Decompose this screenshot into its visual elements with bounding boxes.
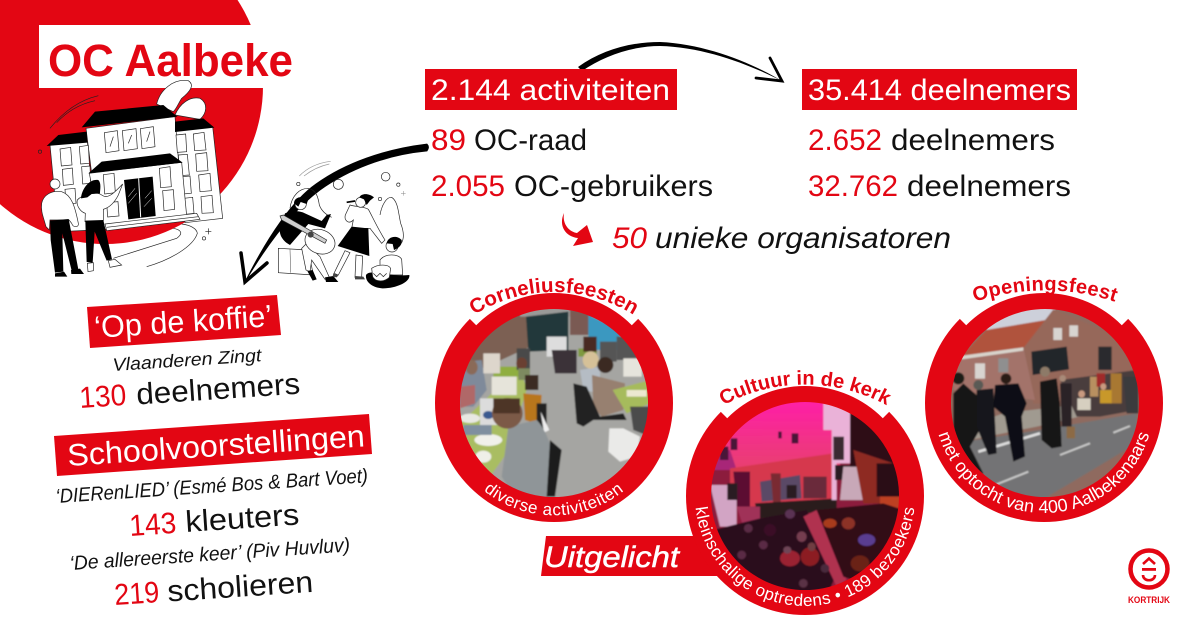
logo: Kortrijk [1128, 550, 1170, 605]
red background circle [0, 0, 263, 244]
label: kleinschalige optredens: kleinschalige optredens • 189 bezoekers [696, 506, 914, 606]
panel: op de koffie: Vlaanderen Zingt [112, 345, 263, 375]
photo: parade [951, 309, 1139, 497]
panel: schoolvoorstellingen: Schoolvoorstellingen [66, 418, 366, 473]
callout: uitgelicht: Uitgelicht [544, 541, 681, 574]
panel: schoolvoorstellingen: scholieren [166, 566, 314, 608]
stat block: activiteiten: OC-gebruikers [514, 170, 713, 203]
panel: schoolvoorstellingen: ‘De allereerste keer’ (Piv Huvluv) [69, 534, 351, 575]
stat block: deelnemers: 35.414 deelnemers [808, 74, 1071, 107]
illustration: musicians [278, 161, 409, 288]
panel: schoolvoorstellingen: 143 [128, 507, 177, 543]
panel: Openingsfeest photo circle [925, 276, 1163, 522]
label: diverse activiteiten: diverse activiteiten [485, 484, 623, 516]
panel: schoolvoorstellingen: ‘DIERenLIED’ (Esmé Bos & Bart Voet) [55, 465, 369, 508]
panel: Cultuur in de kerk photo circle [686, 370, 924, 615]
stat block: activiteiten: 89 [431, 124, 466, 157]
arrow: top curved [578, 42, 782, 81]
panel: schoolvoorstellingen: kleuters [184, 499, 300, 539]
label: met optocht: met optocht van 400 Aalbekenaars [938, 432, 1149, 513]
stat block: activiteiten: 2.144 activiteiten [431, 74, 670, 107]
label: Openingsfeest: Openingsfeest [973, 276, 1118, 302]
stat block: deelnemers: deelnemers [891, 124, 1055, 157]
arrow: left curved [241, 144, 428, 282]
stat block: deelnemers: 2.652 [808, 124, 882, 157]
photo: stage in church [711, 402, 899, 590]
panel: schoolvoorstellingen: 219 [113, 576, 160, 612]
label: Cultuur in de kerk: Cultuur in de kerk [720, 370, 892, 406]
callout: uitgelicht [541, 536, 730, 576]
illustration: building with two people [38, 80, 223, 277]
logo: Kortrijk: KORTRIJK [1128, 595, 1170, 605]
panel: op de koffie: deelnemers [135, 368, 301, 411]
stat block: deelnemers: deelnemers [907, 170, 1071, 203]
stat block: activiteiten: 2.055 [431, 170, 505, 203]
panel: schoolvoorstellingen [54, 414, 372, 612]
stat block: activiteiten [425, 69, 713, 203]
stat block: activiteiten: OC-raad [474, 124, 587, 157]
stat block: deelnemers: 32.762 [808, 170, 898, 203]
unieke organisatoren: unieke organisatoren [655, 222, 951, 255]
panel: Corneliusfeesten photo circle [435, 278, 673, 522]
panel: op de koffie: ‘Op de koffie’ [93, 298, 273, 345]
panel: op de koffie: 130 [78, 379, 127, 415]
unieke organisatoren: 50 [612, 222, 647, 255]
photo: dinner tables [460, 309, 648, 497]
panel: op de koffie [78, 295, 301, 415]
title: OC Aalbeke [48, 35, 293, 86]
arrow: small red [562, 213, 593, 246]
label: Corneliusfeesten: Corneliusfeesten [470, 278, 637, 314]
stat block: deelnemers [802, 69, 1077, 203]
